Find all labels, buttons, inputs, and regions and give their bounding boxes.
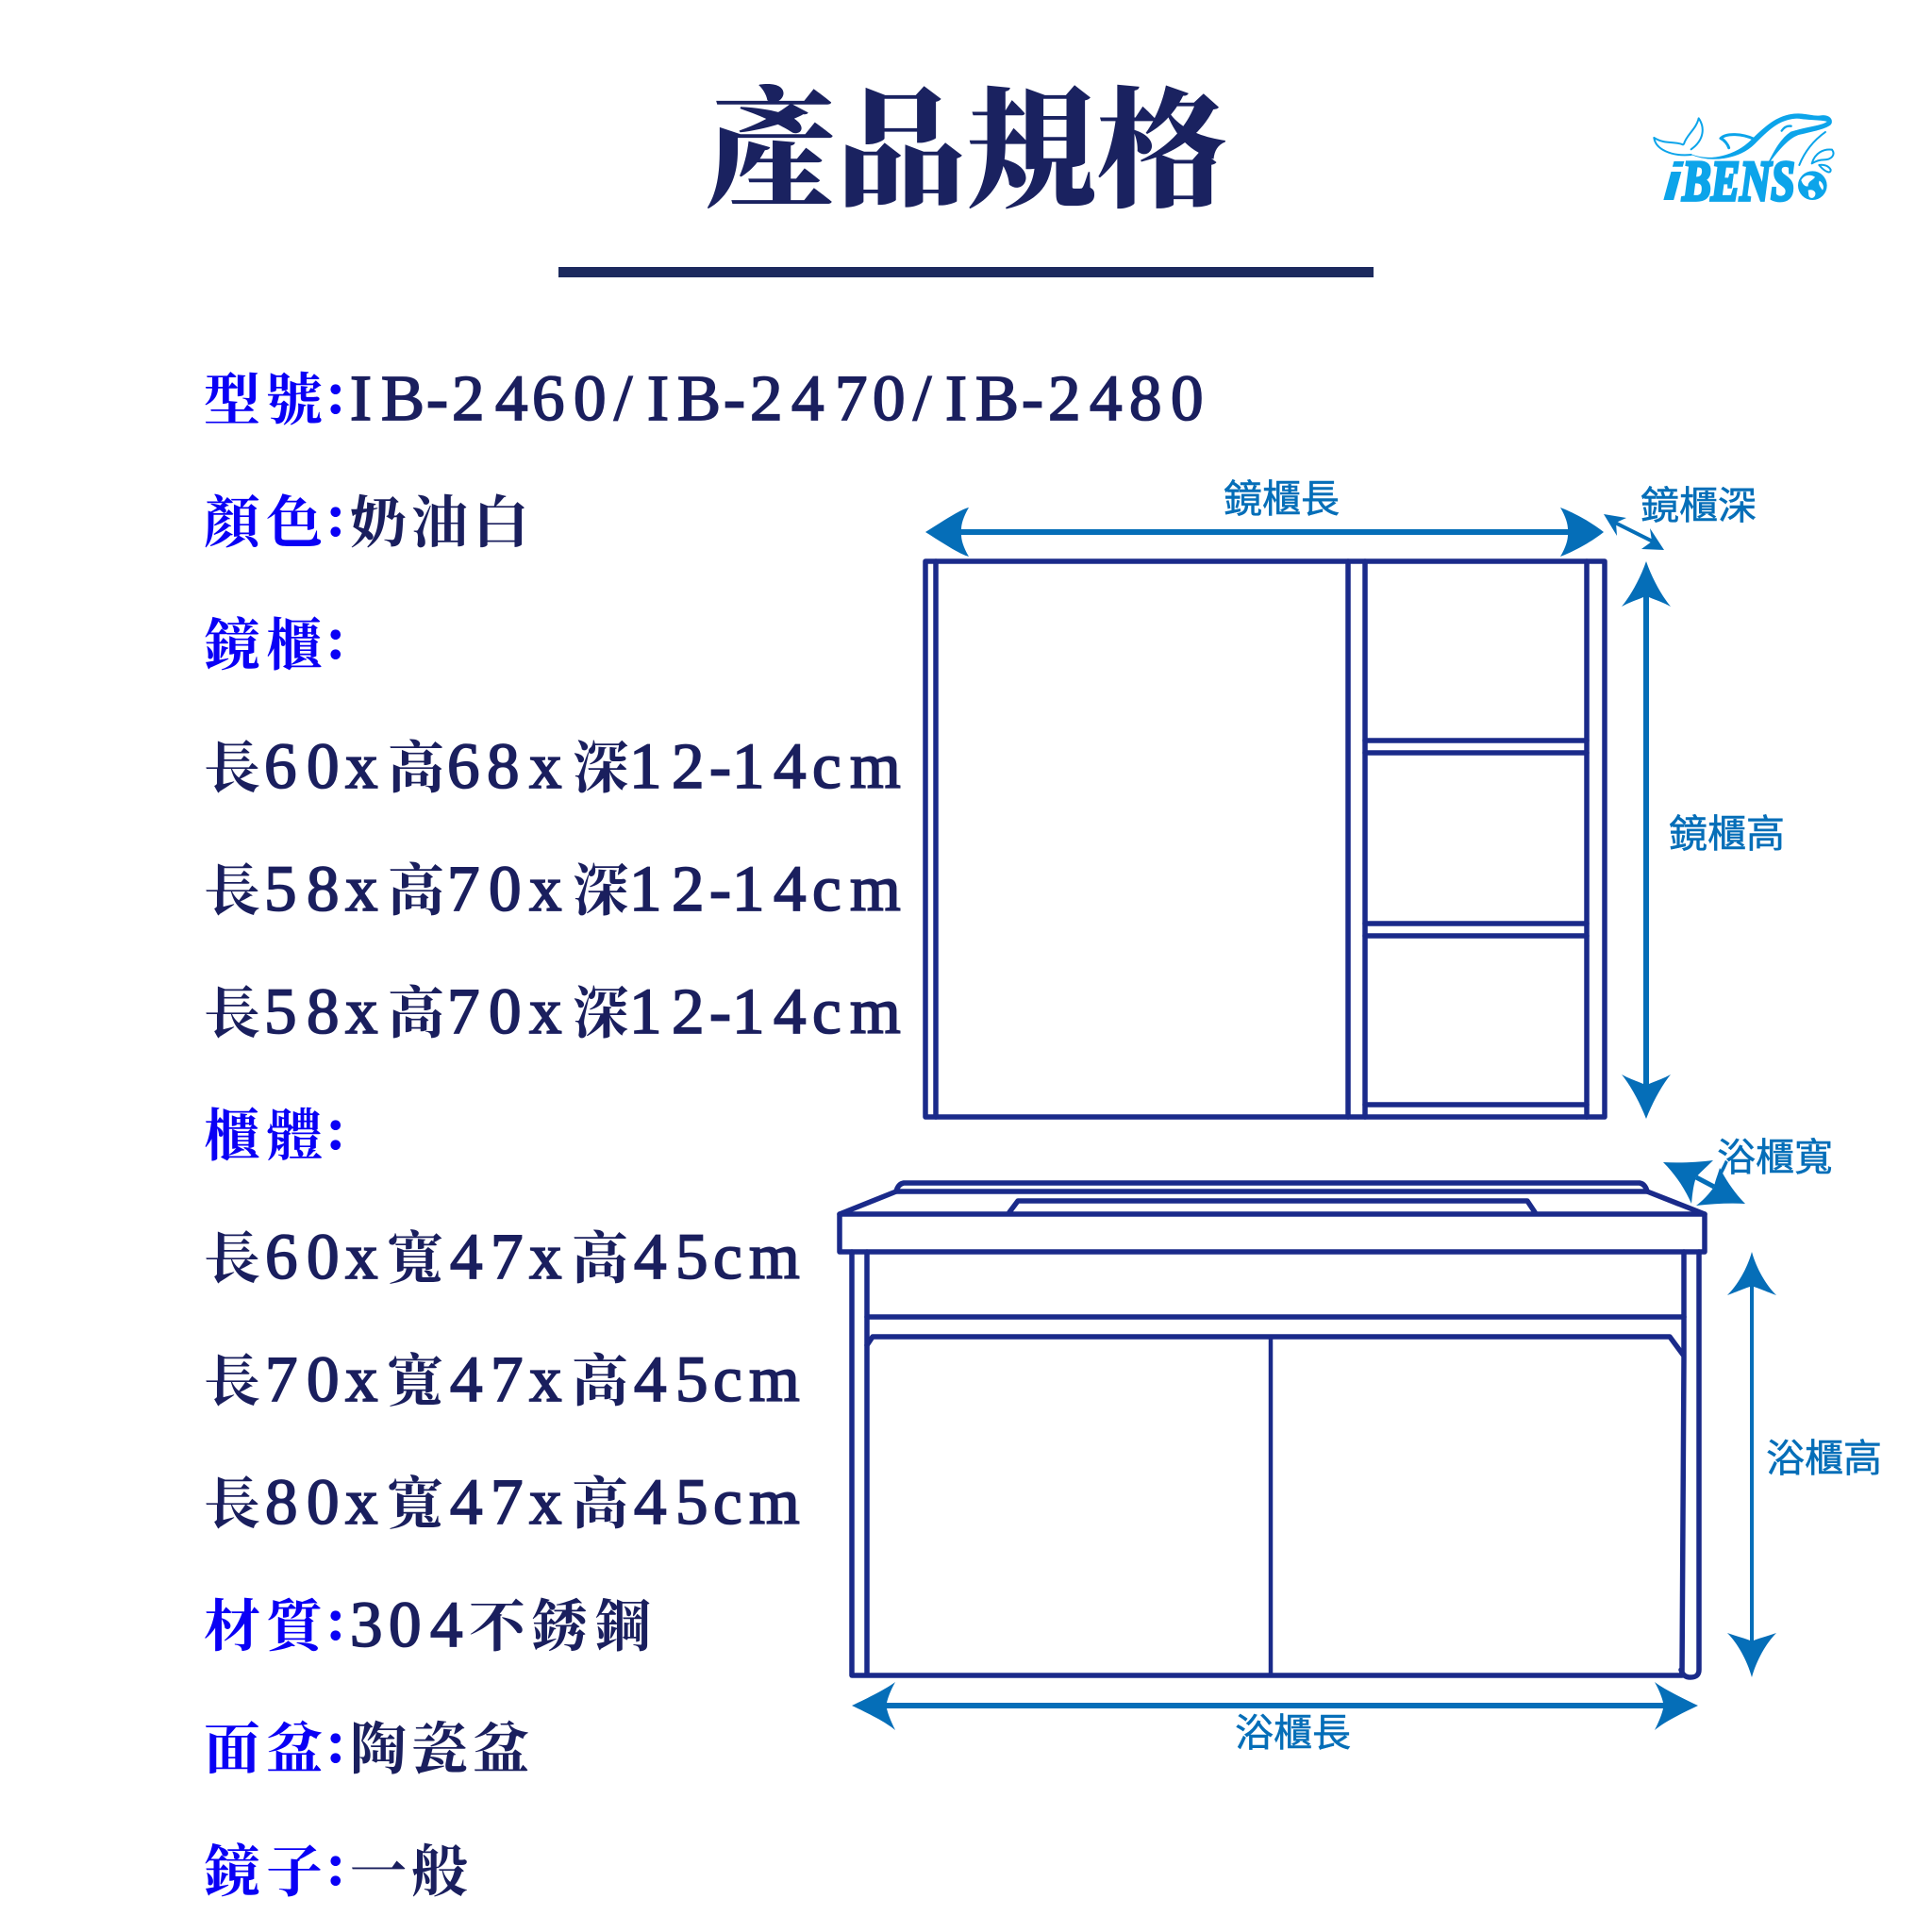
mirror cabinet heading: 鏡 bbox=[204, 601, 260, 682]
model: IB-2460/IB-2470/IB-2480 bbox=[350, 362, 1204, 434]
cabinet size 3: 長 bbox=[204, 1459, 260, 1541]
mirror size 3: 高 bbox=[388, 969, 444, 1050]
mirror size 2: 12-14cm bbox=[629, 853, 901, 924]
colour: 奶油白 bbox=[350, 478, 529, 559]
mirror cabinet heading: 櫃 bbox=[266, 601, 323, 682]
label: mirror depth: 鏡櫃深 bbox=[1641, 484, 1757, 527]
mirror size 3: 58x bbox=[264, 975, 377, 1047]
mirror size 2: 長 bbox=[204, 846, 260, 927]
mirror type: 鏡 bbox=[204, 1827, 260, 1908]
material: : bbox=[325, 1585, 346, 1654]
material: 304 bbox=[350, 1589, 462, 1660]
drawer rail bbox=[867, 1314, 1684, 1320]
cabinet heading: 體 bbox=[266, 1091, 323, 1173]
logo wordmark: I: i bbox=[1662, 153, 1685, 212]
title: 產品規格 bbox=[706, 47, 1226, 234]
cabinet size 2: 寬 bbox=[387, 1337, 443, 1418]
cabinet size 2: 47x bbox=[450, 1343, 562, 1415]
cabinet heading: 櫃 bbox=[204, 1091, 260, 1173]
basin: 盆 bbox=[266, 1705, 323, 1786]
globe bbox=[1798, 171, 1827, 200]
material: 不銹鋼 bbox=[469, 1582, 651, 1663]
colour: 顏 bbox=[204, 478, 263, 559]
spec list bbox=[204, 356, 1204, 1908]
cabinet size 1: 45cm bbox=[634, 1221, 800, 1292]
cabinet size 1: 47x bbox=[450, 1221, 562, 1292]
mirror size 2: 深 bbox=[573, 846, 629, 927]
cabinet size 2: 高 bbox=[572, 1337, 628, 1418]
cabinet size 2: 45cm bbox=[634, 1343, 800, 1415]
label: mirror length: 鏡櫃長 bbox=[1224, 477, 1340, 521]
mirror size 1: 高 bbox=[388, 724, 444, 805]
basin: 陶瓷盆 bbox=[350, 1705, 529, 1786]
colour: 色 bbox=[266, 478, 323, 559]
arrow: mirror cabinet depth bbox=[1604, 514, 1664, 550]
basin: 面 bbox=[204, 1705, 260, 1786]
mirror type: : bbox=[325, 1830, 346, 1899]
logo wordmark: BENS: BENS bbox=[1682, 150, 1795, 212]
colour: : bbox=[325, 481, 346, 550]
mirror size 2: 高 bbox=[388, 846, 444, 927]
mirror size 3: 長 bbox=[204, 969, 260, 1050]
arrow: vanity height bbox=[1727, 1252, 1776, 1677]
mirror type: 子 bbox=[266, 1827, 323, 1908]
mirror type: 一般 bbox=[350, 1827, 468, 1908]
arrow: vanity length bbox=[852, 1682, 1698, 1730]
cabinet size 3: 寬 bbox=[387, 1459, 443, 1541]
logo: IBENSO dolphin bbox=[1654, 114, 1833, 212]
cabinet size 1: 長 bbox=[204, 1214, 260, 1295]
cabinet size 2: 長 bbox=[204, 1337, 260, 1418]
cabinet size 2: 70x bbox=[265, 1343, 377, 1415]
cabinet size 3: 80x bbox=[265, 1466, 377, 1538]
cabinet size 1: 高 bbox=[572, 1214, 628, 1295]
arrow: mirror cabinet length bbox=[925, 508, 1604, 557]
legs and body bbox=[852, 1252, 1699, 1677]
countertop bbox=[840, 1214, 1705, 1252]
mirror size 3: 深 bbox=[573, 969, 629, 1050]
label: vanity length: 浴櫃長 bbox=[1235, 1711, 1351, 1755]
label: vanity height: 浴櫃高 bbox=[1766, 1437, 1882, 1480]
mirror size 1: 12-14cm bbox=[629, 730, 901, 802]
dolphin fin, eye and belly bbox=[1721, 126, 1833, 172]
cabinet size 3: 高 bbox=[572, 1459, 628, 1541]
door top bbox=[867, 1337, 1683, 1355]
mirror size 1: 60x bbox=[264, 730, 377, 802]
arrow: mirror cabinet height bbox=[1622, 561, 1671, 1119]
mirror size 1: 68x bbox=[447, 730, 562, 802]
cabinet size 3: 45cm bbox=[634, 1466, 800, 1538]
cabinet heading: : bbox=[325, 1094, 346, 1163]
dolphin tail bbox=[1654, 118, 1703, 155]
model: : bbox=[325, 358, 346, 427]
mirror size 1: 深 bbox=[573, 724, 629, 805]
diagram: vanity cabinet bbox=[840, 1183, 1705, 1677]
cabinet size 1: 60x bbox=[265, 1221, 377, 1292]
material: 質 bbox=[266, 1582, 329, 1663]
mirror size 1: 長 bbox=[204, 724, 260, 805]
mirror size 3: 12-14cm bbox=[629, 975, 901, 1047]
mirror size 3: 70x bbox=[447, 975, 562, 1047]
arrow: vanity depth bbox=[1663, 1160, 1745, 1206]
diagram: mirror cabinet bbox=[925, 561, 1605, 1117]
dolphin body bbox=[1691, 114, 1832, 165]
mirror size 2: 58x bbox=[264, 853, 377, 924]
cabinet size 3: 47x bbox=[450, 1466, 562, 1538]
cabinet size 1: 寬 bbox=[387, 1214, 443, 1295]
label: vanity width: 浴櫃寬 bbox=[1717, 1136, 1833, 1179]
model: 型 bbox=[204, 356, 260, 437]
material: 材 bbox=[204, 1582, 260, 1663]
basin: : bbox=[325, 1707, 346, 1776]
model: 號 bbox=[266, 356, 323, 437]
title underline bbox=[558, 267, 1374, 277]
label: mirror height: 鏡櫃高 bbox=[1669, 812, 1785, 856]
mirror size 2: 70x bbox=[447, 853, 562, 924]
basin bbox=[1009, 1201, 1535, 1212]
mirror cabinet heading: : bbox=[325, 604, 346, 673]
